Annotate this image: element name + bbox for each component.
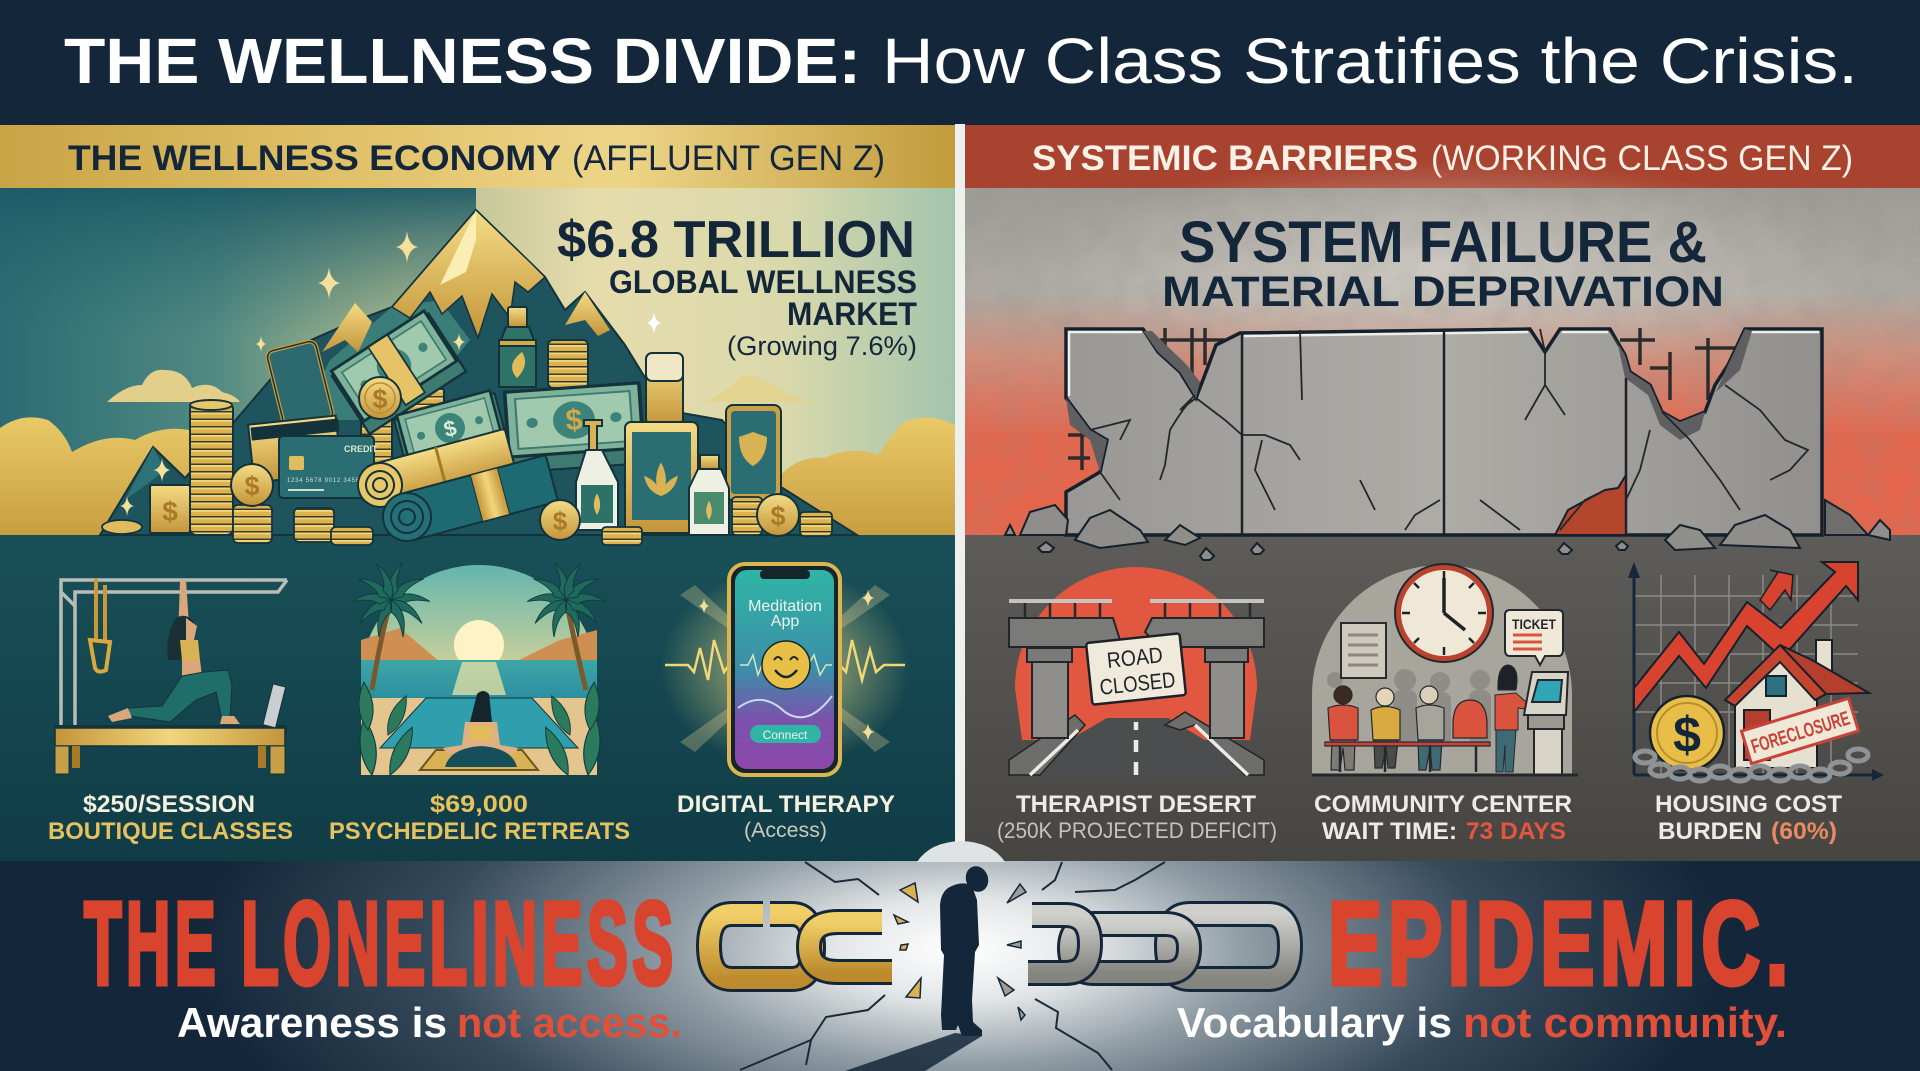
label: housing cost burden: HOUSING COST (1655, 791, 1842, 818)
small bottle (689, 455, 729, 535)
title bar (0, 0, 1920, 125)
market stat text (557, 211, 917, 361)
tilted phone (266, 340, 334, 430)
house (1725, 640, 1869, 768)
icon: psychedelic retreat (352, 561, 605, 778)
woman at kiosk (1495, 665, 1534, 772)
caption: awareness is not access: Awareness is (177, 999, 447, 1046)
right lower section background (965, 535, 1920, 861)
icon: road closed bridge: CLOSED (1098, 667, 1177, 700)
market stat text: MARKET (787, 296, 917, 332)
foreclosure stamp (1741, 698, 1859, 764)
label: housing cost burden: BURDEN (1658, 818, 1762, 845)
gold coin on money (359, 377, 401, 419)
icon: housing cost chart (1628, 562, 1884, 781)
left lower section background (0, 535, 955, 861)
tall coin stack (190, 400, 233, 535)
left panel header (0, 125, 955, 188)
market stat text: GLOBAL WELLNESS (609, 264, 917, 300)
ticket kiosk (1524, 672, 1568, 775)
gold dollar card: $ (162, 496, 178, 527)
left panel header: (AFFLUENT GEN Z) (572, 139, 885, 178)
sparkles (120, 231, 662, 516)
label: digital therapy: DIGITAL THERAPY (677, 791, 895, 818)
loneliness headline: THE LONELINESS (84, 877, 677, 1009)
panel: the wellness economy (0, 125, 955, 861)
left panel header: THE WELLNESS ECONOMY (68, 139, 561, 178)
ticket bubble (1505, 610, 1563, 665)
label: psychedelic retreats: PSYCHEDELIC RETREATS (329, 818, 630, 845)
money stacks: $ (565, 403, 584, 438)
label: housing cost burden: (60%) (1771, 818, 1837, 845)
money stacks (329, 310, 645, 474)
poster (1341, 623, 1386, 678)
scattered rubble (1038, 541, 1628, 560)
label: therapist desert: (250K PROJECTED DEFICIT) (997, 818, 1277, 843)
icon: meditation app phone (660, 564, 910, 775)
market stat text: (Growing 7.6%) (727, 331, 917, 361)
mountain (100, 210, 857, 535)
label: psychedelic retreats (329, 791, 630, 845)
icon: pilates reformer (55, 578, 287, 774)
cracked wall illustration (965, 160, 1920, 550)
caption: vocabulary is not community: not community. (1463, 999, 1787, 1046)
dollar coins: $ (553, 506, 568, 536)
label: community center wait time (1314, 791, 1572, 845)
loneliness headline: EPIDEMIC. (1328, 878, 1794, 1010)
right panel header (965, 125, 1920, 188)
market stat text: $6.8 TRILLION (557, 211, 915, 269)
tablet (625, 422, 698, 533)
title: bold part: THE WELLNESS DIVIDE: (64, 25, 861, 97)
label: boutique classes: $250/SESSION (83, 791, 255, 818)
credit card: 1234 5678 9012 3456 (287, 478, 360, 484)
money stacks: $ (441, 415, 459, 442)
caption: vocabulary is not community (1177, 999, 1787, 1046)
icon: road closed bridge (1009, 567, 1264, 775)
label: therapist desert: THERAPIST DESERT (1016, 791, 1256, 818)
system failure heading (1162, 210, 1724, 316)
background cracks (740, 862, 1165, 1070)
rubble (1005, 500, 1890, 550)
label: digital therapy (677, 791, 895, 842)
label: housing cost burden (1655, 791, 1842, 845)
glass jar (646, 353, 683, 425)
dollar coins: $ (770, 501, 786, 531)
gold coin on money: $ (372, 384, 388, 414)
label: boutique classes (48, 791, 293, 845)
silver broken chain (1028, 914, 1290, 979)
icon: waiting room and clock (1312, 564, 1578, 775)
dollar coin: $ (1673, 707, 1701, 763)
icon: meditation app phone: App (771, 613, 799, 630)
label: psychedelic retreats: $69,000 (430, 791, 528, 818)
system failure heading: SYSTEM FAILURE & (1179, 210, 1707, 275)
pump bottle (576, 420, 618, 530)
small coin stacks (102, 497, 832, 545)
right panel header: SYSTEMIC BARRIERS (1032, 139, 1418, 178)
seated people (1325, 686, 1490, 772)
loneliness headline (84, 877, 1794, 1010)
caption: awareness is not access: not access. (457, 999, 682, 1046)
label: digital therapy: (Access) (744, 819, 827, 842)
label: community center wait time: COMMUNITY CENTER (1314, 791, 1572, 818)
clouds (0, 370, 955, 535)
dark break faces (1066, 329, 1752, 472)
gold yoga mat (353, 429, 516, 512)
panel: systemic barriers (965, 125, 1920, 861)
rebar (1068, 328, 1740, 470)
label: boutique classes: BOUTIQUE CLASSES (48, 818, 293, 845)
wall clock (1395, 564, 1493, 662)
credit card (279, 436, 378, 498)
phone with shield (726, 405, 781, 500)
broken chain shards (894, 883, 1026, 1020)
caption: awareness is not access (177, 999, 682, 1046)
panel: the loneliness epidemic (0, 841, 1920, 1071)
gold card (248, 416, 342, 482)
ticket bubble: TICKET (1512, 616, 1556, 632)
icon: road closed bridge: ROAD (1106, 642, 1164, 673)
label: community center wait time: 73 DAYS (1466, 818, 1566, 845)
wealth mountain illustration (0, 188, 955, 546)
dollar coins (231, 464, 799, 540)
icon: meditation app phone: Connect (763, 728, 808, 742)
dollar coin (1650, 696, 1724, 770)
coin stacks upper (361, 340, 588, 463)
gold dollar card (150, 485, 190, 533)
right panel header: (WORKING CLASS GEN Z) (1431, 139, 1853, 178)
shadow (845, 1033, 982, 1071)
gold broken chain (709, 914, 892, 979)
caption: vocabulary is not community: Vocabulary is (1177, 999, 1452, 1046)
icon: meditation app phone: Meditation (748, 598, 822, 615)
chain (1635, 749, 1868, 781)
title: regular part: How Class Stratifies the Crisis. (882, 25, 1858, 97)
teal yoga mat (378, 455, 558, 546)
red hole in wall (1555, 475, 1626, 535)
wall seams and cracks (1242, 329, 1626, 535)
label: therapist desert (997, 791, 1277, 843)
credit card: CREDIT (344, 444, 378, 454)
system failure heading: MATERIAL DEPRIVATION (1162, 268, 1724, 316)
lonely figure silhouette (940, 863, 992, 1036)
wall (1066, 329, 1822, 535)
dollar coins: $ (244, 471, 260, 501)
foreclosure stamp: FORECLOSURE (1749, 707, 1853, 758)
green bottle (499, 307, 536, 387)
label: community center wait time: WAIT TIME: (1322, 818, 1457, 845)
